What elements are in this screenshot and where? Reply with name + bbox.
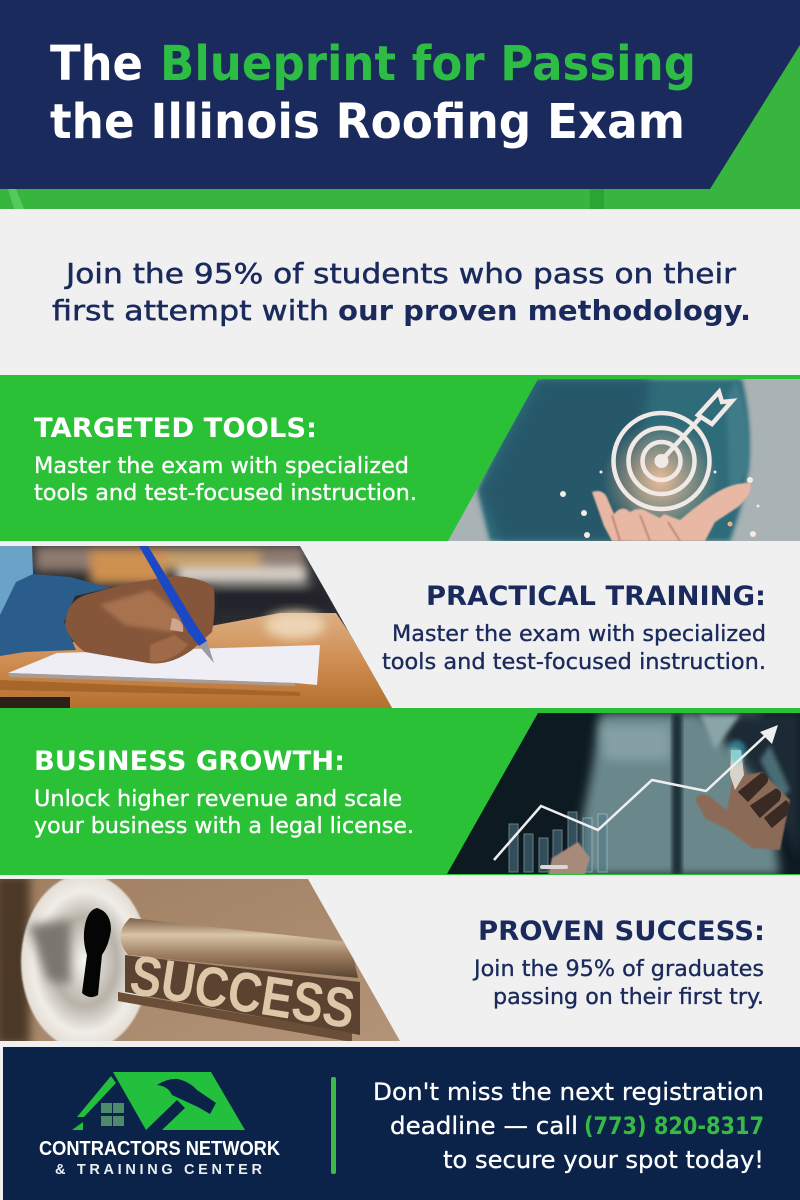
call to action: to secure your spot today! [443, 1146, 764, 1174]
body text [382, 622, 766, 675]
panel: targeted tools [0, 375, 800, 541]
body text: Master the exam with specialized [34, 454, 409, 479]
title: The [50, 36, 143, 92]
divider [331, 1077, 336, 1174]
body text: tools and test-focused instruction. [34, 481, 417, 506]
panel: business growth [0, 708, 800, 875]
intro statement: our proven methodology. [338, 294, 751, 327]
call to action [373, 1078, 764, 1174]
logo wordmark: CONTRACTORS NETWORK [39, 1138, 281, 1160]
body text: Unlock higher revenue and scale [34, 787, 402, 812]
heading: PRACTICAL TRAINING: [426, 581, 766, 612]
title: Blueprint for Passing [160, 36, 696, 92]
footer [3, 1047, 800, 1200]
body text: Master the exam with specialized [392, 622, 766, 647]
photo: hand with target [440, 379, 800, 541]
photo: hand writing [0, 546, 400, 708]
body text: tools and test-focused instruction. [382, 650, 766, 675]
intro statement: Join the 95% of students who pass on their [64, 257, 737, 290]
logo [39, 1072, 281, 1178]
heading: TARGETED TOOLS: [34, 413, 317, 444]
icon: roof and hammer [72, 1072, 245, 1130]
intro statement [52, 257, 751, 327]
photo: rising chart [440, 713, 800, 875]
intro statement: first attempt with [52, 294, 329, 327]
body text [472, 957, 764, 1010]
call to action: Don't miss the next registration [373, 1078, 764, 1106]
photo: key labelled success: SUCCESS [126, 943, 359, 1040]
body text [34, 454, 417, 506]
call to action: deadline — call [390, 1112, 578, 1140]
logo tagline: & TRAINING CENTER [55, 1162, 263, 1178]
header banner [0, 0, 800, 209]
heading: PROVEN SUCCESS: [478, 916, 765, 947]
title: the Illinois Roofing Exam [50, 94, 685, 150]
title [50, 36, 696, 150]
body text: your business with a legal license. [34, 814, 414, 839]
body text [34, 787, 414, 839]
call to action: (773) 820-8317 [584, 1112, 764, 1140]
panel: practical training [0, 546, 766, 708]
heading: BUSINESS GROWTH: [34, 746, 345, 777]
photo: key labelled success [0, 879, 400, 1041]
body text: Join the 95% of graduates [472, 957, 764, 982]
body text: passing on their first try. [493, 985, 764, 1010]
panel: proven success [0, 874, 765, 1050]
